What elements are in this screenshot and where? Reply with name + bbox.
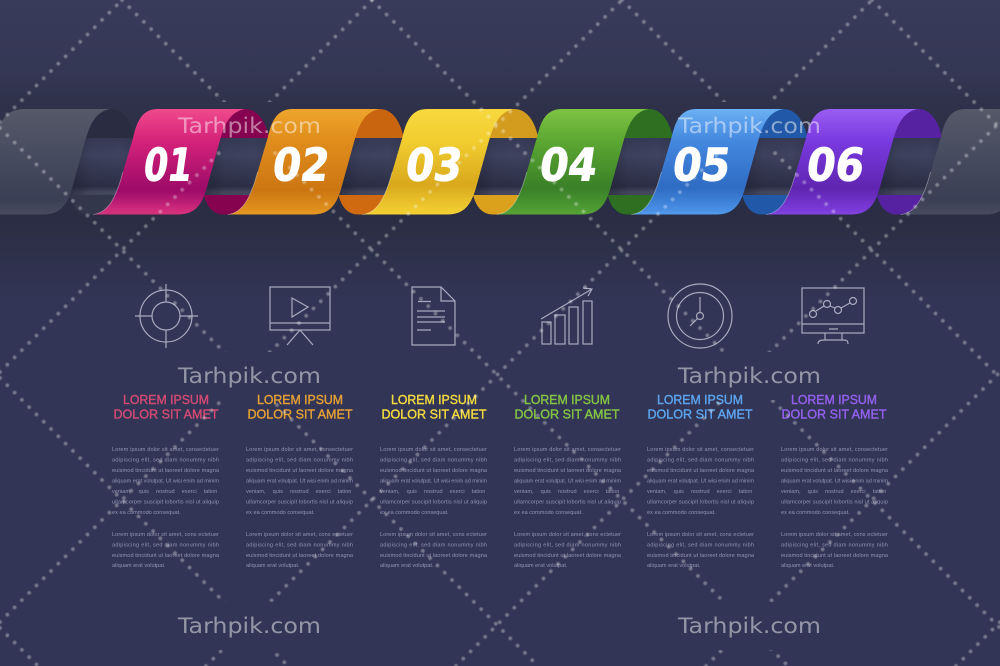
column 4 heading [514, 393, 620, 422]
column 4 text: adipiscing elit, sed diam nonummy nibh [514, 458, 621, 464]
ribbon back: segment 03 [473, 109, 539, 214]
ribbon front: segment 04 [497, 109, 649, 214]
column 2 text: adipiscing elit, sed diam nonummy nibh [246, 542, 353, 548]
column 1 text: aliquam erat volutpat. [112, 563, 166, 569]
column 3 text: adipiscing elit, sed diam nonummy nibh [380, 542, 487, 548]
column 5 text: adipiscing elit, sed diam nonummy nibh [647, 542, 754, 548]
column 1 heading: LOREM IPSUM [123, 393, 209, 407]
column 5 heading: LOREM IPSUM [657, 393, 743, 407]
column 3 text: aliquam erat volutpat. [380, 563, 434, 569]
column 6 text: ullamcorper suscipit lobortis nisl ut aliquip [781, 500, 888, 506]
column 4 text: euismod tincidunt ut laoreet dolore magna [514, 553, 622, 559]
column 3 heading [382, 393, 487, 422]
ribbon front: grey end [901, 109, 1000, 214]
column 6 text: Lorem ipsum dolor sit amet, consectetuer [781, 447, 888, 453]
column 6 heading: DOLOR SIT AMET [782, 408, 887, 422]
column 2 text: euismod tincidunt ut laoreet dolore magna [246, 468, 354, 474]
ribbon back: segment 04 [608, 109, 674, 214]
ribbon front: segment 03 [362, 109, 514, 214]
column 3 text: veniam, quis nostrud exerci tation [380, 489, 485, 495]
column 4 heading: DOLOR SIT AMET [514, 408, 620, 422]
column 4 text: ex ea commodo consequat. [514, 510, 583, 516]
ribbon front: grey start [0, 109, 110, 214]
column 6 text: euismod tincidunt ut laoreet dolore magna [781, 468, 889, 474]
column 3 heading: LOREM IPSUM [391, 393, 477, 407]
watermarks: Tarhpik.com [177, 114, 321, 139]
icon: presentation board [270, 287, 330, 345]
column 6 text [781, 447, 889, 569]
watermarks: Tarhpik.com [677, 614, 821, 639]
ribbon front: segment 01 [93, 109, 245, 214]
column 3 text [380, 447, 488, 569]
column 6 text: adipiscing elit, sed diam nonummy nibh [781, 458, 888, 464]
column 4 text: aliquam erat volutpat. Ut wisi enim ad minim [514, 478, 621, 484]
column 6 text: aliquam erat volutpat. [781, 563, 835, 569]
number 03: 03 [402, 139, 466, 191]
column 6 text: adipiscing elit, sed diam nonummy nibh [781, 542, 888, 548]
ribbon back: grey start [69, 109, 135, 214]
column 2 heading: DOLOR SIT AMET [248, 408, 353, 422]
ribbon back: segment 01 [204, 109, 270, 214]
column 3 text: euismod tincidunt ut laoreet dolore magna [380, 468, 488, 474]
column 1 text: ullamcorper suscipit lobortis nisl ut aliquip [112, 500, 219, 506]
column 1 text: Lorem ipsum dolor sit amet, cons ectetuer [112, 532, 219, 538]
column 4 text: Lorem ipsum dolor sit amet, consectetuer [514, 447, 621, 453]
column 1 text: adipiscing elit, sed diam nonummy nibh [112, 458, 219, 464]
column 4 heading: LOREM IPSUM [524, 393, 610, 407]
column 5 text: euismod tincidunt ut laoreet dolore magna [647, 553, 755, 559]
column 2 text: aliquam erat volutpat. Ut wisi enim ad minim [246, 478, 353, 484]
watermarks: Tarhpik.com [177, 614, 321, 639]
ribbon front: segment 02 [228, 109, 380, 214]
column 4 text: aliquam erat volutpat. [514, 563, 568, 569]
column 5 heading: DOLOR SIT AMET [648, 408, 753, 422]
number 06: 06 [803, 139, 868, 191]
column 1 text: euismod tincidunt ut laoreet dolore magna [112, 553, 220, 559]
number 02: 02 [269, 139, 333, 191]
column 5 text: Lorem ipsum dolor sit amet, consectetuer [647, 447, 754, 453]
column 5 text: ex ea commodo consequat. [647, 510, 716, 516]
column 3 text: Lorem ipsum dolor sit amet, consectetuer [380, 447, 487, 453]
column 1 text [112, 447, 220, 569]
column 3 text: euismod tincidunt ut laoreet dolore magna [380, 553, 488, 559]
column 4 text [514, 447, 622, 569]
icon: monitor chart [802, 288, 864, 344]
number 04: 04 [536, 139, 601, 191]
column 3 text: ex ea commodo consequat. [380, 510, 449, 516]
column 1 text: veniam, quis nostrud exerci tation [112, 489, 217, 495]
column 3 heading: DOLOR SIT AMET [382, 408, 487, 422]
column 2 heading [248, 393, 353, 422]
column 2 text [246, 447, 354, 569]
watermarks: Tarhpik.com [677, 364, 821, 389]
ribbon front: segment 05 [631, 109, 783, 214]
column 5 heading [648, 393, 753, 422]
column 5 text: adipiscing elit, sed diam nonummy nibh [647, 458, 754, 464]
column 2 text: Lorem ipsum dolor sit amet, consectetuer [246, 447, 353, 453]
column 5 text [647, 447, 755, 569]
column 4 text: adipiscing elit, sed diam nonummy nibh [514, 542, 621, 548]
column 1 text: euismod tincidunt ut laoreet dolore magna [112, 468, 220, 474]
ribbon back: segment 02 [339, 109, 405, 214]
ribbon back: segment 06 [877, 109, 943, 214]
column 6 text: aliquam erat volutpat. Ut wisi enim ad minim [781, 478, 888, 484]
column 2 heading: LOREM IPSUM [257, 393, 343, 407]
column 2 text: ex ea commodo consequat. [246, 510, 315, 516]
watermarks: Tarhpik.com [677, 114, 821, 139]
column 3 text: Lorem ipsum dolor sit amet, cons ectetuer [380, 532, 487, 538]
ribbon timeline [0, 109, 1000, 214]
column 3 text: ullamcorper suscipit lobortis nisl ut aliquip [380, 500, 487, 506]
column 1 heading: DOLOR SIT AMET [114, 408, 219, 422]
column 6 text: veniam, quis nostrud exerci tation [781, 489, 886, 495]
icon: growth chart [541, 288, 592, 344]
column 5 text: aliquam erat volutpat. [647, 563, 701, 569]
column 1 heading [114, 393, 219, 422]
column 6 heading: LOREM IPSUM [791, 393, 877, 407]
column 1 text: adipiscing elit, sed diam nonummy nibh [112, 542, 219, 548]
column 6 text: euismod tincidunt ut laoreet dolore magna [781, 553, 889, 559]
number 01: 01 [140, 139, 196, 191]
column 4 text: euismod tincidunt ut laoreet dolore magna [514, 468, 622, 474]
column 6 text: ex ea commodo consequat. [781, 510, 850, 516]
column 5 text: ullamcorper suscipit lobortis nisl ut aliquip [647, 500, 754, 506]
column 2 text: euismod tincidunt ut laoreet dolore magna [246, 553, 354, 559]
column 2 text: adipiscing elit, sed diam nonummy nibh [246, 458, 353, 464]
column 2 text: Lorem ipsum dolor sit amet, cons ectetuer [246, 532, 353, 538]
column 2 text: aliquam erat volutpat. [246, 563, 300, 569]
column 5 text: veniam, quis nostrud exerci tation [647, 489, 752, 495]
column 1 text: ex ea commodo consequat. [112, 510, 181, 516]
column 4 text: ullamcorper suscipit lobortis nisl ut aliquip [514, 500, 621, 506]
column 3 text: aliquam erat volutpat. Ut wisi enim ad minim [380, 478, 487, 484]
column 5 text: euismod tincidunt ut laoreet dolore magna [647, 468, 755, 474]
column 5 text: aliquam erat volutpat. Ut wisi enim ad minim [647, 478, 754, 484]
watermarks [177, 114, 821, 639]
icon: document [412, 287, 455, 345]
column 3 text: adipiscing elit, sed diam nonummy nibh [380, 458, 487, 464]
watermarks: Tarhpik.com [177, 364, 321, 389]
column 4 text: veniam, quis nostrud exerci tation [514, 489, 619, 495]
column 2 text: ullamcorper suscipit lobortis nisl ut aliquip [246, 500, 353, 506]
column 1 text: Lorem ipsum dolor sit amet, consectetuer [112, 447, 219, 453]
column 4 text: Lorem ipsum dolor sit amet, cons ectetuer [514, 532, 621, 538]
icon: clock [668, 284, 732, 348]
column 5 text: Lorem ipsum dolor sit amet, cons ectetuer [647, 532, 754, 538]
ribbon back: segment 05 [742, 109, 808, 214]
ribbon front: segment 06 [766, 109, 918, 214]
number 05: 05 [669, 139, 734, 191]
column 6 heading [782, 393, 887, 422]
column 2 text: veniam, quis nostrud exerci tation [246, 489, 351, 495]
column 6 text: Lorem ipsum dolor sit amet, cons ectetuer [781, 532, 888, 538]
column 1 text: aliquam erat volutpat. Ut wisi enim ad minim [112, 478, 219, 484]
icon: target [135, 284, 198, 348]
